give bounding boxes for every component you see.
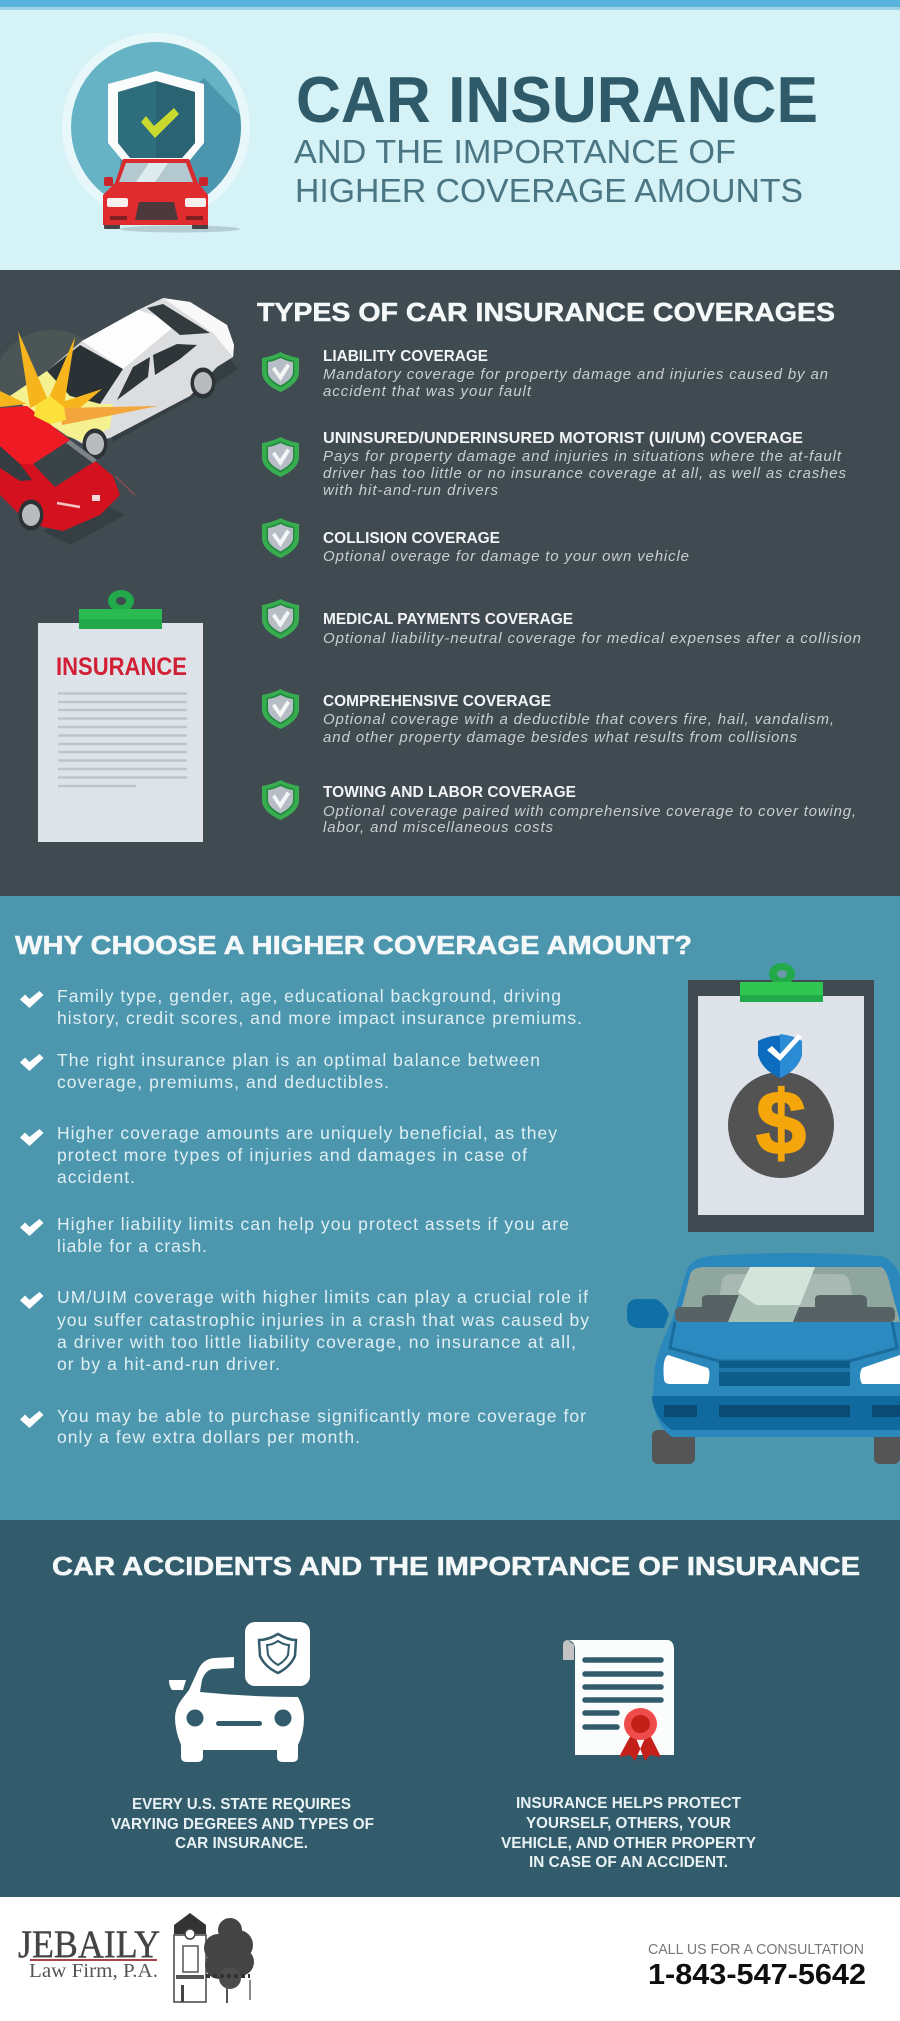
panel: header bbox=[0, 0, 900, 270]
bullet: premiums: Family type, gender, age, educational background, driving bbox=[57, 986, 561, 1006]
illustration: insurance clipboard bbox=[38, 590, 203, 842]
item: medical payments coverage: MEDICAL PAYMENTS COVERAGE bbox=[323, 611, 573, 628]
item: towing and labor coverage: labor, and miscellaneous costs bbox=[323, 819, 554, 836]
bullet: UM/UIM coverage: you suffer catastrophic injuries in a crash that was caused by bbox=[57, 1310, 589, 1330]
bullet: right plan: coverage, premiums, and deductibles. bbox=[57, 1072, 389, 1092]
subtitle: HIGHER COVERAGE AMOUNTS bbox=[295, 172, 803, 209]
logo: Jebaily Law Firm: JEBAILY bbox=[18, 1923, 160, 1966]
item: towing and labor coverage bbox=[262, 780, 856, 836]
bullet: right plan bbox=[20, 1050, 540, 1092]
item: uninsured motorist coverage: Pays for property damage and injuries in situations where the at-fault bbox=[323, 448, 842, 465]
subtitle: AND THE IMPORTANCE OF bbox=[294, 133, 736, 170]
logo: building and tree bbox=[174, 1913, 254, 2003]
panel: why choose a higher coverage amount bbox=[0, 896, 900, 1520]
text: every state: EVERY U.S. STATE REQUIRES bbox=[132, 1796, 351, 1813]
text: every state: VARYING DEGREES AND TYPES OF bbox=[111, 1816, 374, 1833]
text: insurance helps: YOURSELF, OTHERS, YOUR bbox=[526, 1815, 731, 1832]
item: liability coverage: Mandatory coverage for property damage and injuries caused by an bbox=[323, 366, 828, 383]
text: every state bbox=[111, 1796, 374, 1852]
item: uninsured motorist coverage bbox=[262, 430, 846, 499]
bullet: UM/UIM coverage: a driver with too little liability coverage, no insurance at all, bbox=[57, 1332, 576, 1352]
item: comprehensive coverage: Optional coverage with a deductible that covers fire, hail, vandalism, bbox=[323, 711, 834, 728]
heading: why choose: WHY CHOOSE A HIGHER COVERAGE AMOUNT? bbox=[15, 930, 692, 960]
item: comprehensive coverage bbox=[262, 689, 834, 746]
bullet: premiums: history, credit scores, and more impact insurance premiums. bbox=[57, 1008, 582, 1028]
subtitle bbox=[294, 133, 803, 209]
logo: Jebaily Law Firm bbox=[18, 1913, 254, 2003]
item: comprehensive coverage: COMPREHENSIVE COVERAGE bbox=[323, 693, 551, 710]
item: comprehensive coverage: and other property damage besides what results from collisions bbox=[323, 729, 798, 746]
icon: dollar sign: $ bbox=[756, 1074, 806, 1174]
bullet: higher amounts: protect more types of injuries and damages in case of bbox=[57, 1145, 527, 1165]
text: every state: CAR INSURANCE. bbox=[175, 1835, 308, 1852]
call to action bbox=[648, 1941, 866, 1991]
bullet: UM/UIM coverage bbox=[20, 1287, 589, 1374]
illustration: two car crash bbox=[0, 298, 238, 545]
bullet: higher amounts: Higher coverage amounts are uniquely beneficial, as they bbox=[57, 1123, 557, 1143]
item: liability coverage: accident that was your fault bbox=[323, 383, 532, 400]
text: insurance helps bbox=[501, 1795, 757, 1871]
item: liability coverage: LIABILITY COVERAGE bbox=[323, 348, 488, 365]
illustration: clipboard with money bbox=[688, 963, 874, 1232]
call to action: CALL US FOR A CONSULTATION bbox=[648, 1941, 864, 1958]
bullet: higher amounts bbox=[20, 1123, 557, 1187]
icon: policy document with seal bbox=[563, 1640, 674, 1761]
item: uninsured motorist coverage: UNINSURED/UNDERINSURED MOTORIST (UI/UM) COVERAGE bbox=[323, 430, 803, 447]
item: medical payments coverage: Optional liability-neutral coverage for medical expenses after a collision bbox=[323, 630, 861, 647]
phone number: 1-843-547-5642 bbox=[648, 1959, 866, 1991]
item: uninsured motorist coverage: driver has too little or no insurance coverage at all, as well as crashes bbox=[323, 465, 846, 482]
text: insurance helps: VEHICLE, AND OTHER PROPERTY bbox=[501, 1835, 757, 1852]
title: CAR INSURANCE bbox=[296, 63, 818, 136]
item: towing and labor coverage: Optional coverage paired with comprehensive coverage to cover towing, bbox=[323, 803, 856, 820]
text: insurance helps: IN CASE OF AN ACCIDENT. bbox=[529, 1854, 728, 1871]
item: collision coverage: COLLISION COVERAGE bbox=[323, 530, 500, 547]
item: collision coverage bbox=[262, 518, 689, 565]
icon: shield on car badge bbox=[62, 33, 250, 232]
icon: blue shield bbox=[758, 1034, 802, 1078]
bullet: premiums bbox=[20, 986, 582, 1028]
item: collision coverage: Optional overage for damage to your own vehicle bbox=[323, 548, 689, 565]
heading: types of coverages: TYPES OF CAR INSURANCE COVERAGES bbox=[257, 297, 835, 327]
bullet: liability limits: liable for a crash. bbox=[57, 1236, 207, 1256]
bullet: higher amounts: accident. bbox=[57, 1167, 135, 1187]
heading: car accidents: CAR ACCIDENTS AND THE IMPORTANCE OF INSURANCE bbox=[52, 1551, 860, 1581]
panel: types of car insurance coverages bbox=[0, 270, 900, 896]
panel: footer bbox=[0, 1897, 900, 2021]
item: uninsured motorist coverage: with hit-and-run drivers bbox=[323, 482, 498, 499]
bullet: UM/UIM coverage: or by a hit-and-run driver. bbox=[57, 1354, 280, 1374]
item: liability coverage bbox=[262, 348, 828, 400]
item: medical payments coverage bbox=[262, 599, 861, 647]
text: insurance helps: INSURANCE HELPS PROTECT bbox=[516, 1795, 742, 1812]
icon: car with shield bbox=[169, 1622, 310, 1762]
bullet: liability limits: Higher liability limits can help you protect assets if you are bbox=[57, 1214, 569, 1234]
bullet: liability limits bbox=[20, 1214, 569, 1256]
title bbox=[294, 63, 818, 209]
bullet: right plan: The right insurance plan is an optimal balance between bbox=[57, 1050, 540, 1070]
bullet: extra dollars: You may be able to purchase significantly more coverage for bbox=[57, 1406, 586, 1426]
illustration: blue car bbox=[627, 1253, 900, 1464]
bullet: UM/UIM coverage: UM/UIM coverage with higher limits can play a crucial role if bbox=[57, 1287, 588, 1307]
logo: Jebaily Law Firm: Law Firm, P.A. bbox=[29, 1960, 158, 1982]
bullet: extra dollars: only a few extra dollars per month. bbox=[57, 1427, 360, 1447]
bullet: extra dollars bbox=[20, 1406, 586, 1447]
panel: car accidents and the importance of insurance bbox=[0, 1520, 900, 1897]
item: towing and labor coverage: TOWING AND LABOR COVERAGE bbox=[323, 784, 576, 801]
label: insurance: INSURANCE bbox=[56, 653, 187, 681]
